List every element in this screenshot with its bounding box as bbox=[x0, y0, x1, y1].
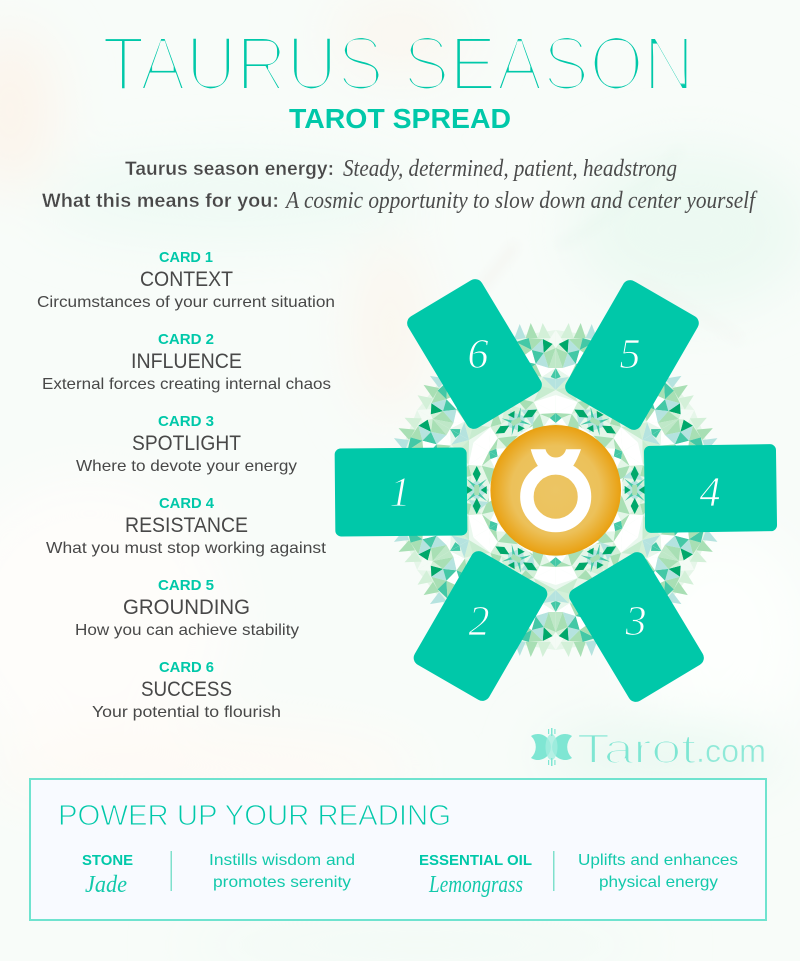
essential oil description: Uplifts and enhances bbox=[578, 852, 738, 869]
stone label: Jade bbox=[85, 872, 127, 898]
card 5 description: CARD 5 bbox=[158, 577, 214, 594]
card 2 description: INFLUENCE bbox=[131, 350, 242, 373]
card 2 description bbox=[42, 331, 331, 393]
card 6 description: CARD 6 bbox=[159, 659, 214, 676]
essential oil label bbox=[419, 852, 532, 898]
gold circle with Taurus symbol bbox=[490, 425, 621, 556]
intro text block: A cosmic opportunity to slow down and center yourself bbox=[284, 188, 758, 214]
card 6: 6 bbox=[468, 332, 488, 378]
intro text block: What this means for you: bbox=[42, 191, 279, 212]
essential oil label: ESSENTIAL OIL bbox=[419, 852, 532, 869]
card 4 description bbox=[46, 495, 327, 557]
card descriptions list bbox=[37, 249, 335, 721]
card 3 bbox=[566, 549, 707, 705]
icon: crescent moons bbox=[531, 728, 572, 766]
card 5 description bbox=[75, 577, 299, 639]
card 2: 2 bbox=[468, 599, 490, 645]
card 3 description: Where to devote your energy bbox=[76, 458, 297, 475]
card 3: 3 bbox=[624, 599, 646, 645]
card 3 description bbox=[76, 413, 297, 475]
card 2 description: CARD 2 bbox=[158, 331, 214, 348]
essential oil label: Lemongrass bbox=[428, 872, 523, 898]
card 1 description bbox=[37, 249, 335, 311]
Tarot.com logo bbox=[531, 725, 766, 772]
essential oil description: physical energy bbox=[599, 874, 718, 891]
card 4: 4 bbox=[700, 470, 720, 516]
intro text block: Taurus season energy: bbox=[125, 159, 334, 180]
panel: power up your reading bbox=[30, 779, 766, 920]
intro text block bbox=[42, 156, 758, 214]
card 5 description: How you can achieve stability bbox=[75, 622, 299, 639]
essential oil description bbox=[578, 852, 738, 891]
card 4 description: What you must stop working against bbox=[46, 540, 327, 557]
mandala pattern bbox=[378, 323, 733, 657]
stone description: promotes serenity bbox=[213, 874, 351, 891]
Tarot.com logo: Tarot bbox=[577, 725, 696, 772]
stone label bbox=[82, 852, 133, 898]
card 4 bbox=[644, 444, 777, 533]
card 5: 5 bbox=[620, 332, 640, 378]
card 2 bbox=[411, 548, 550, 704]
card 1 description: CONTEXT bbox=[140, 268, 233, 291]
card 4 description: CARD 4 bbox=[159, 495, 215, 512]
stone description: Instills wisdom and bbox=[209, 852, 355, 869]
card 1 bbox=[335, 447, 467, 537]
card 3 description: SPOTLIGHT bbox=[132, 432, 241, 455]
card 5 description: GROUNDING bbox=[123, 596, 250, 619]
Tarot.com logo: .com bbox=[696, 733, 766, 769]
card 3 description: CARD 3 bbox=[158, 413, 214, 430]
panel heading: POWER UP YOUR READING bbox=[58, 800, 451, 832]
stone description bbox=[209, 852, 355, 891]
intro text block: Steady, determined, patient, headstrong bbox=[343, 156, 677, 182]
card 5 bbox=[562, 277, 702, 433]
title: TAURUS SEASON bbox=[102, 21, 694, 107]
card 1: 1 bbox=[390, 470, 410, 516]
card 1 description: Circumstances of your current situation bbox=[37, 294, 335, 311]
stone label: STONE bbox=[82, 852, 133, 869]
tarot cards bbox=[335, 276, 777, 705]
card 2 description: External forces creating internal chaos bbox=[42, 376, 331, 393]
card 4 description: RESISTANCE bbox=[125, 514, 248, 537]
card 6 description: Your potential to flourish bbox=[92, 704, 281, 721]
subtitle: TAROT SPREAD bbox=[289, 103, 511, 134]
card 6 description bbox=[92, 659, 281, 721]
card 1 description: CARD 1 bbox=[159, 249, 213, 266]
icon: Taurus glyph bbox=[527, 449, 584, 526]
card 6 bbox=[404, 276, 545, 432]
card 6 description: SUCCESS bbox=[141, 678, 232, 701]
